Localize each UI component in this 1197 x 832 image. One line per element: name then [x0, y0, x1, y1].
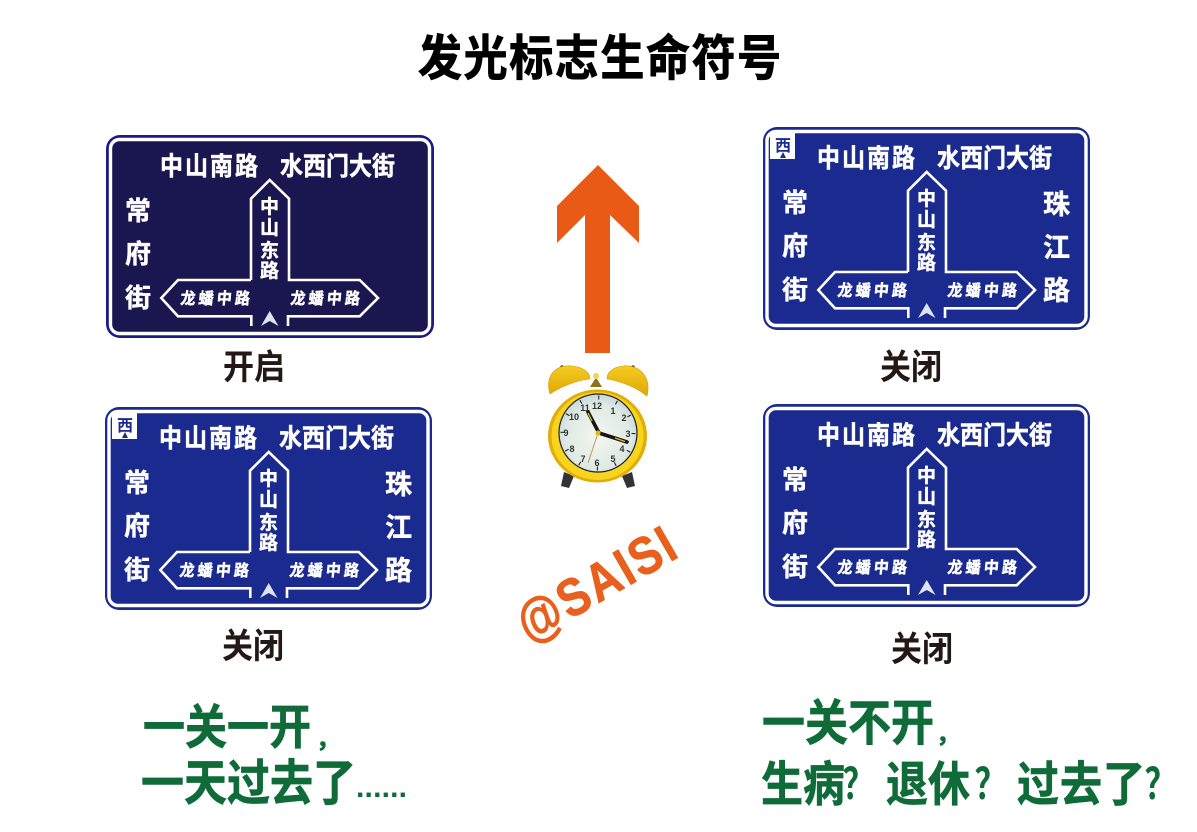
title: 发光标志生命符号 [418, 31, 783, 85]
icon: alarm clock: 9 [563, 428, 569, 438]
road names: 路 [1043, 276, 1070, 306]
road names: 山 [917, 209, 936, 231]
road names [124, 425, 412, 586]
road names: 路 [260, 260, 279, 282]
road names [782, 145, 1070, 306]
north marker [918, 580, 936, 595]
road names: 路 [917, 529, 936, 551]
caption: right: ， [936, 721, 960, 748]
caption: left: ...... [356, 771, 407, 804]
road names: 中 [917, 465, 936, 487]
road names: 街 [124, 555, 150, 585]
north marker [260, 583, 278, 598]
north marker [261, 311, 278, 326]
direction badge: 西 [117, 418, 133, 435]
caption: right: ？ [974, 762, 1007, 809]
label: on: 开启 [223, 347, 285, 386]
road names: 水西门大街 [937, 422, 1052, 450]
panel: sign on, top left [106, 135, 434, 338]
road names: 常 [782, 188, 808, 218]
icon: alarm clock: 7 [580, 454, 586, 464]
road names: 街 [782, 275, 808, 305]
panel: sign off, bottom right [763, 404, 1090, 607]
road names: 龙蟠中路 [837, 280, 911, 300]
road names: 中 [917, 188, 936, 210]
icon: alarm clock: 6 [594, 458, 600, 468]
road names: 常 [782, 465, 808, 495]
road names: 东 [917, 508, 936, 531]
road names: 府 [782, 508, 808, 538]
road names: 东 [917, 231, 936, 254]
icon: alarm clock: 11 [580, 403, 590, 413]
icon: alarm clock [548, 365, 648, 488]
road names: 珠 [1043, 190, 1070, 220]
road names: 龙蟠中路 [290, 288, 364, 308]
road names: 水西门大街 [280, 153, 395, 181]
road names: 路 [385, 556, 412, 586]
road names: 龙蟠中路 [947, 557, 1021, 577]
road names: 山 [917, 486, 936, 508]
road names: 龙蟠中路 [837, 557, 911, 577]
road names: 府 [782, 231, 808, 261]
watermark: @SAISI [506, 514, 689, 653]
road names: 路 [259, 532, 278, 554]
road names: 中 [260, 196, 279, 218]
road junction outline [161, 180, 378, 326]
road names: 龙蟠中路 [947, 280, 1021, 300]
road names: 江 [385, 513, 412, 543]
direction badge [770, 133, 795, 159]
caption: right [761, 696, 1177, 812]
arrow: upward orange [557, 165, 639, 353]
icon: alarm clock: 8 [569, 444, 575, 454]
road names: 水西门大街 [279, 425, 394, 453]
road names: 中 [259, 468, 278, 490]
road names: 常 [125, 196, 151, 226]
road names: 中山南路 [159, 425, 259, 453]
label: off, top right: 关闭 [880, 347, 942, 386]
road names: 龙蟠中路 [289, 560, 363, 580]
road names: 东 [260, 239, 279, 262]
caption: right: 生病 [761, 759, 845, 812]
road names: 龙蟠中路 [180, 288, 254, 308]
road names: 中山南路 [817, 145, 917, 173]
direction badge [112, 413, 137, 439]
road names: 龙蟠中路 [179, 560, 253, 580]
caption: right: 退休 [886, 759, 970, 812]
road names: 府 [125, 239, 151, 269]
label: off, bottom left: 关闭 [222, 626, 284, 665]
road names: 水西门大街 [937, 145, 1052, 173]
road junction outline [160, 452, 377, 598]
direction badge: 西 [775, 138, 791, 155]
road names: 东 [259, 511, 278, 534]
icon: alarm clock: 5 [610, 454, 616, 464]
caption: right: ？ [1144, 762, 1177, 809]
road names [125, 153, 395, 313]
road names: 山 [260, 217, 279, 239]
icon: alarm clock: 12 [592, 401, 602, 411]
caption: left [141, 702, 407, 811]
icon: alarm clock: 1 [610, 406, 616, 416]
road names: 街 [125, 283, 151, 313]
panel: sign off, top right [763, 127, 1090, 330]
road names: 常 [124, 468, 150, 498]
panel: sign off, bottom left [105, 407, 432, 610]
label: off, bottom right: 关闭 [891, 629, 953, 668]
caption: left: 一天过去了 [141, 756, 356, 811]
caption: right: 过去了 [1017, 759, 1145, 812]
road names: 山 [259, 489, 278, 511]
icon: alarm clock: 10 [569, 412, 579, 422]
caption: left: 一关一开 [143, 702, 311, 755]
road names: 中山南路 [817, 422, 917, 450]
caption: right: 一关不开 [762, 696, 934, 751]
icon: alarm clock: 3 [625, 429, 631, 439]
road junction outline [818, 449, 1035, 595]
icon: alarm clock: 4 [619, 444, 625, 454]
north marker [918, 303, 936, 318]
road names: 江 [1043, 233, 1070, 263]
road names: 中山南路 [160, 153, 260, 181]
road names: 府 [124, 511, 150, 541]
road junction outline [818, 172, 1035, 318]
road names: 珠 [385, 470, 412, 500]
caption: right: ？ [842, 762, 875, 809]
caption: left: ， [316, 726, 340, 753]
road names: 路 [917, 252, 936, 274]
icon: alarm clock: 2 [621, 413, 627, 423]
road names: 街 [782, 552, 808, 582]
road names [782, 422, 1052, 582]
